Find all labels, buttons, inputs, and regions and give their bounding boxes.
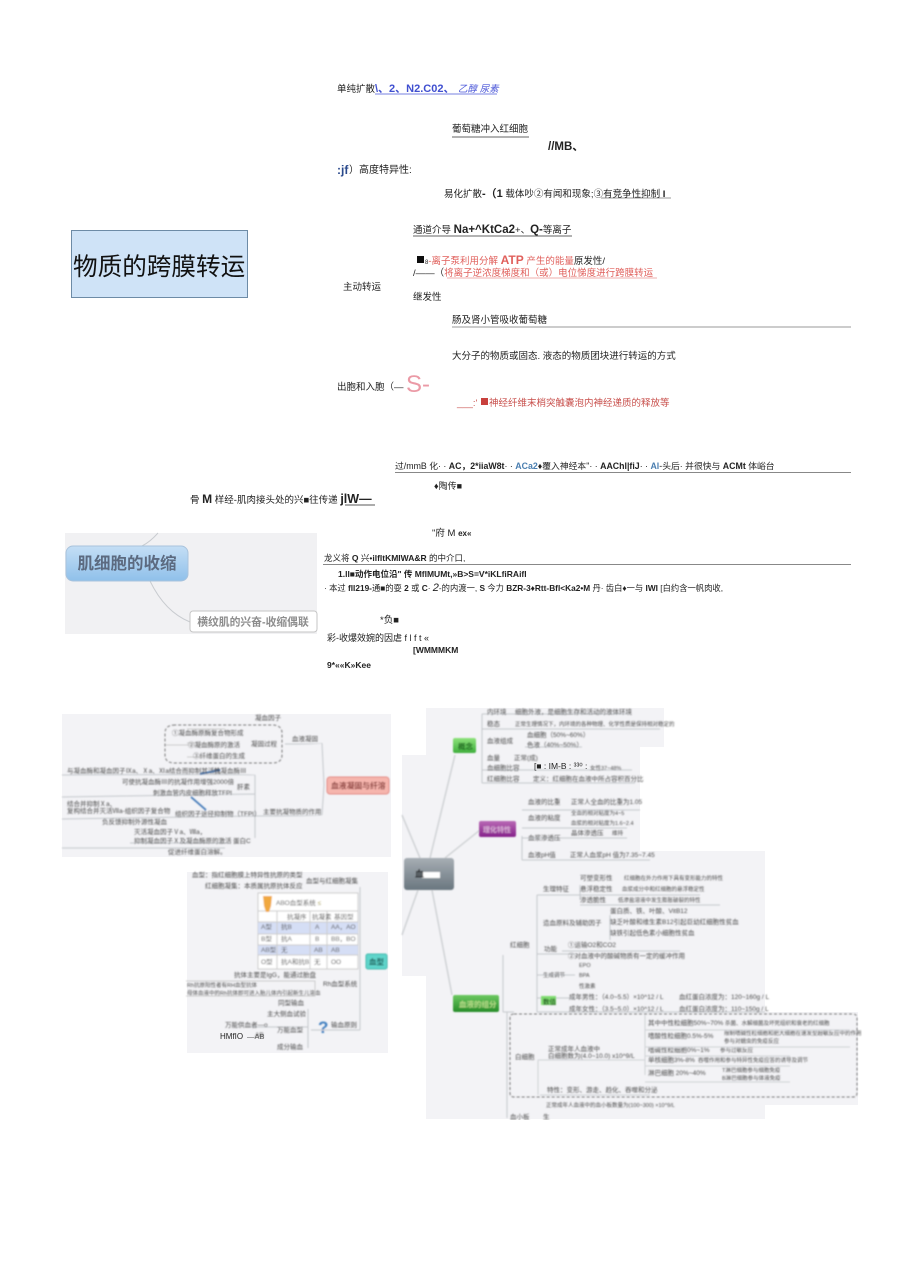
panel: blood overview mind map: 正常(成) — [514, 753, 538, 762]
node: blood components — [453, 995, 499, 1012]
icon: question mark: ? — [318, 1018, 328, 1037]
ABO blood group table: O型 — [261, 957, 273, 966]
panel: blood coagulation and fibrinolysis mind map: 促进纤维蛋白溶解。 — [168, 847, 226, 856]
node: excitation-contraction coupling: 横纹肌的兴奋-收缩偶联 — [197, 614, 309, 628]
ABO blood group table: B — [315, 936, 319, 943]
node: concept: 概念 — [458, 741, 473, 751]
panel: blood types mind map: 输血原则 — [331, 1020, 357, 1029]
panel: blood overview mind map: 淋巴细胞 20%~40% — [648, 1068, 706, 1077]
panel: blood coagulation and fibrinolysis mind map: ③纤维蛋白的生成 — [193, 751, 246, 760]
panel: blood coagulation and fibrinolysis mind map: 凝固过程 — [251, 739, 278, 748]
panel: blood overview mind map: 红细胞在外力作用下具有变形能力的特性 — [624, 874, 724, 882]
ABO blood group table: A — [315, 924, 320, 931]
ABO blood group table: ABO血型系统 ≤ — [276, 898, 322, 907]
ABO blood group table: 无 — [281, 946, 288, 954]
fragment label: [WMMMKM — [413, 645, 458, 655]
panel: blood coagulation and fibrinolysis mind map: 主要抗凝物质的作用 — [263, 807, 322, 816]
panel: blood overview mind map: 白细胞 — [515, 1052, 535, 1061]
panel: blood types mind map: AB — [255, 1032, 264, 1039]
panel: blood coagulation and fibrinolysis mind map: 负反馈抑制外源性凝血 — [102, 817, 168, 826]
ABO blood group table: 无 — [314, 958, 321, 966]
panel: blood types mind map: 血型与红细胞凝集 — [306, 876, 358, 885]
panel: blood overview mind map: 成年女性：（3.5~5.0）×10^12 / L — [569, 1004, 664, 1013]
node: coagulation and fibrinolysis — [327, 777, 389, 794]
exocytosis label: 出胞和入胞（— — [337, 381, 404, 393]
panel: muscle cell contraction mind map — [65, 533, 317, 634]
active transport label: 主动转运 — [343, 281, 382, 293]
panel: blood overview mind map: 血红蛋白浓度为：110~150g / L — [679, 1004, 769, 1013]
panel: blood overview mind map: 限制嗜碱性粒细胞和肥大细胞在速发型超敏反应中的作用 — [724, 1029, 862, 1037]
panel: blood overview mind map — [402, 707, 862, 1121]
panel: blood overview mind map: T淋巴细胞参与细胞免疫 — [722, 1066, 781, 1074]
macromolecule definition: 大分子的物质或固态. 液态的物质团块进行转运的方式 — [452, 350, 676, 362]
panel: blood overview mind map: 生成调节 — [543, 971, 566, 979]
panel: blood overview mind map: 参与对蠕虫的免疫反应 — [724, 1037, 780, 1045]
panel: blood overview mind map: EPO — [579, 963, 591, 969]
title box: 物质的跨膜转运 — [72, 230, 248, 298]
panel: blood types mind map: Rh血型系统 — [323, 979, 358, 988]
label M ex: "府 M ex« — [432, 527, 472, 539]
label: HMfIO: HMfIO — [220, 1032, 243, 1041]
node: physicochemical properties: 理化特性 — [483, 825, 511, 834]
panel: blood types mind map: 母体血液中的Rh抗体即可进入胎儿体内引起新生儿溶血 — [187, 989, 321, 997]
panel: blood types mind map: 万能血型 — [277, 1025, 304, 1034]
panel: blood coagulation and fibrinolysis mind map: 复构结合并灭活Ⅶa-组织因子复合物 — [67, 806, 171, 815]
panel: blood overview mind map: 正常成年人血液中 — [548, 1044, 600, 1053]
panel: blood overview mind map: BPA — [579, 973, 590, 979]
panel: blood overview mind map: 正常生理情况下，内环境的各种物理、化学性质是保持相对稳定的 — [515, 720, 675, 728]
panel: blood overview mind map: 稳态 — [487, 719, 500, 728]
connector lines — [62, 743, 324, 848]
panel: blood overview mind map: 成年男性：（4.0~5.5）×10^12 / L — [569, 992, 664, 1001]
panel: blood types mind map: 血型：指红细胞膜上特异性抗原的类型 — [192, 870, 303, 879]
panel: blood overview mind map: 血红蛋白浓度为：120~160g / L — [679, 992, 770, 1001]
node: blood (center) — [404, 858, 454, 890]
panel: blood coagulation and fibrinolysis mind map: 组织因子途径抑制物（TFPI） — [175, 809, 261, 818]
node: physicochemical properties — [479, 821, 516, 837]
panel: blood overview mind map: 维持 — [612, 829, 624, 837]
secondary active label: 继发性 — [413, 291, 442, 303]
panel: blood overview mind map: 正常成年人血液中的血小板数量为(100~300) ×10^9/L — [546, 1101, 675, 1109]
panel: blood overview mind map: 红细胞 — [510, 940, 530, 949]
panel: blood overview mind map: 女性37~48% — [590, 764, 621, 772]
panel: blood overview mind map: 定义：红细胞在血液中所占容积百分比 — [533, 774, 644, 783]
panel: blood overview mind map: 其中中性粒细胞50%~70% — [648, 1018, 724, 1027]
panel: blood coagulation and fibrinolysis mind map: 肝素 — [237, 782, 250, 791]
panel: blood coagulation and fibrinolysis mind map: 灭活凝血因子Ⅴa、Ⅷa， — [134, 827, 206, 836]
panel: blood overview mind map: B淋巴细胞参与体液免疫 — [722, 1074, 781, 1082]
neurotransmitter release: 神经纤维末梢突触囊泡内神经递质的释放等 — [489, 397, 670, 409]
panel: blood overview mind map: 渗透脆性 — [580, 895, 606, 904]
simple diffusion line: 单纯扩散 — [337, 83, 376, 95]
panel: blood coagulation and fibrinolysis mind map: 抑制凝血因子Ⅹ及凝血酶原的激活 — [134, 836, 232, 845]
panel: blood types mind map: 抗体主要是IgG，能通过胎盘 — [234, 970, 316, 979]
node: muscle cell contraction: 肌细胞的收缩 — [78, 553, 176, 573]
ABO blood group table: 抗凝素 — [312, 912, 332, 921]
definition line: 龙义将 Q 兴•ilfltKMIWA&R 的中介口, — [324, 553, 465, 563]
ABO blood group table: AB — [314, 947, 323, 954]
panel: blood overview mind map: 血浆的相对粘度为1.6~2.4 — [571, 819, 634, 827]
panel: blood overview mind map: 血液组成 — [487, 736, 514, 745]
simple diffusion line: \、2、N2.C02、 — [375, 83, 454, 95]
node: concept — [453, 738, 476, 753]
panel: blood overview mind map: 色液（40%~50%） — [527, 740, 583, 749]
panel: blood overview mind map: 白细胞数为(4.0~10.0) x10^9/L — [548, 1051, 635, 1060]
panel: blood overview mind map: 全血的相对粘度为4~5 — [571, 809, 624, 817]
panel: blood overview mind map: 特性：变形、游走、趋化、吞噬和分泌 — [547, 1085, 658, 1094]
panel: blood coagulation and fibrinolysis mind map: ②凝血酶原的激活 — [188, 740, 240, 749]
panel: blood overview mind map: 嗜碱性粒细胞0%~1% — [648, 1045, 710, 1054]
panel: blood overview mind map: 可塑变形性 — [580, 873, 613, 882]
panel: blood overview mind map: 血小板 — [510, 1112, 530, 1121]
panel: blood overview mind map: 低渗盐溶液中发生膨胀破裂的特性 — [618, 896, 701, 904]
simple diffusion line: 乙醇 尿素 — [458, 83, 500, 95]
connector lines — [402, 755, 480, 995]
panel: blood overview mind map: 生 — [543, 1112, 550, 1121]
panel: blood types mind map: 万能供血者—o — [225, 1020, 268, 1029]
neurotransmitter release: ___:' — [456, 398, 477, 409]
ABO blood group table: A型 — [261, 922, 272, 931]
panel: blood types mind map: Rh抗原阳性者有RH血型抗体 — [187, 981, 257, 989]
ABO blood group table: AB型 — [261, 945, 277, 954]
panel: blood overview mind map: 正常人全血的比重为1.05 — [571, 797, 643, 806]
panel: blood overview mind map: 蛋白质、铁、叶酸、VitB12 — [610, 906, 688, 915]
panel: blood types mind map: 同型输血 — [278, 998, 304, 1007]
panel: blood types mind map: 红细胞凝集：本质属抗原抗体反应 — [205, 881, 303, 890]
panel: blood overview mind map: 晶体渗透压 — [571, 828, 604, 837]
simple diffusion line — [337, 83, 500, 95]
node: blood (center): 血 — [415, 868, 424, 879]
label: dash AB: —AB — [247, 1032, 265, 1041]
panel: blood overview mind map: 血量 — [487, 753, 500, 762]
panel: blood overview mind map: 内环境 — [487, 707, 507, 716]
panel: blood overview mind map: ②对血液中的酸碱物质有一定的缓冲作用 — [568, 951, 685, 960]
panel: blood coagulation and fibrinolysis mind map: 刺激血管内皮细胞释放TFPI — [153, 788, 232, 797]
ABO blood group table: 抗A和抗B — [281, 957, 309, 966]
panel: blood overview mind map: 血细胞（50%~60%） — [527, 730, 589, 739]
panel: blood overview mind map: ①运输O2和CO2 — [568, 940, 616, 949]
ABO blood group table: AB — [331, 947, 340, 954]
ABO blood group table: BB，BO — [331, 936, 356, 943]
map background — [402, 708, 858, 1119]
ABO blood group table: 抗凝序 — [287, 912, 307, 921]
node: blood components: 血液的组分 — [459, 999, 497, 1009]
facilitated diffusion: 易化扩散-（1 载体吵②有闻和现象;③有竞争性抑制 I — [444, 187, 665, 200]
panel: blood overview mind map: 血液pH值 — [528, 850, 556, 859]
reverse gradient note: /——（将离子逆浓度梯度和（或）电位悌度进行跨膜转运 — [413, 267, 654, 279]
primary active transport: 8-离子泵利用分解 ATP 产生的能量原发性/ — [425, 253, 605, 267]
high specificity: :jf — [337, 163, 349, 177]
overlay fragment text: [■ : IM-B : ³³⁰ : — [534, 761, 587, 771]
node: blood type — [366, 954, 387, 969]
panel: blood overview mind map: 血浆渗透压 — [528, 833, 561, 842]
exocytosis label: S- — [406, 371, 430, 398]
panel: blood coagulation and fibrinolysis mind map: 血液凝固 — [292, 734, 318, 743]
panel: blood overview mind map: 缺铁引起低色素小细胞性贫血 — [610, 928, 695, 937]
fragment label: 9*««K»Kee — [327, 660, 371, 670]
contraction factors: 彩-收爆效婉的因虐 f l f t « — [327, 632, 429, 643]
panel: blood coagulation and fibrinolysis mind map: 凝血因子 — [255, 713, 282, 722]
exocytosis label — [337, 371, 430, 398]
panel: blood overview mind map: 红细胞比容 — [487, 774, 520, 783]
panel: blood overview mind map: 单核细胞3%-8% — [648, 1055, 695, 1064]
panel: blood overview mind map: 性激素 — [579, 982, 596, 990]
panel: blood overview mind map: 嗜酸性粒细胞0.5%-5% — [648, 1031, 714, 1040]
connector lines — [250, 887, 360, 1048]
panel: blood coagulation and fibrinolysis mind map: 抗凝血酶Ⅲ — [214, 766, 246, 775]
node: coagulation and fibrinolysis: 血液凝固与纤溶 — [331, 780, 386, 790]
high specificity — [337, 163, 412, 177]
panel: blood types mind map: 成分输血 — [277, 1042, 304, 1051]
calcium line: · 本过 fll219-通■的耍 2 或 C· 2-的内渡一, S 今力 BZR-3♦Rtt-Bfl<Ka2•M 丹· 齿白♦一与 IWI [白约含一帆肉收, — [324, 582, 723, 594]
panel: blood overview mind map: 参与过敏反应 — [720, 1046, 754, 1054]
panel: blood coagulation and fibrinolysis mind map: 结合并抑制Ⅹa、 — [67, 799, 116, 808]
panel: blood coagulation and fibrinolysis mind map: 可使抗凝血酶Ⅲ的抗凝作用增强2000倍 — [122, 777, 234, 786]
node: blood type: 血型 — [369, 956, 384, 966]
connector lines — [142, 533, 190, 622]
conduction label: ♦陶传■ — [434, 480, 462, 491]
panel: blood overview mind map: 功能 — [544, 944, 558, 953]
panel: blood overview mind map: 杀菌、水解细菌及坏死组织和衰老的红细胞 — [725, 1019, 830, 1027]
arrows — [191, 770, 220, 810]
panel: blood overview mind map: 数值 — [543, 997, 556, 1006]
panel: blood overview mind map: 血液的粘度 — [528, 813, 561, 822]
ABO blood group table: 基因型 — [334, 912, 354, 921]
panel: blood overview mind map: 悬浮稳定性 — [580, 884, 613, 893]
channel mediated: 通道介导 Na+^KtCa2+、Q-等离子 — [413, 224, 572, 236]
ABO blood group table — [258, 893, 358, 969]
title box: 物质的跨膜转运: 物质的跨膜转运 — [73, 253, 245, 281]
glucose into red cells: 葡萄糖冲入红细胞 — [452, 123, 529, 135]
ACh sequence: 过/mmB 化· · AC，2*iiaW8t· · ACa2♦覆入神经本"· · AAChl|fiJ· · Al-头后· 并很快与 ACMt 体峪台 — [395, 460, 775, 471]
panel: blood overview mind map: 血浆成分中和红细胞的悬浮稳定性 — [622, 885, 705, 893]
panel: blood overview mind map: 生理特征 — [543, 884, 570, 893]
panel: blood coagulation and fibrinolysis mind map: 蛋白C — [233, 836, 251, 845]
text block: membrane transport notes — [190, 83, 851, 670]
panel: blood coagulation and fibrinolysis mind map: ①凝血酶原酶复合物形成 — [172, 728, 244, 737]
panel: blood overview mind map: 血细胞比容 — [487, 763, 520, 772]
ABO blood group table: B型 — [261, 934, 272, 943]
action potential line: 1.ll■动作电位沿" 传 MflMUMt,»B>S=V*iKLfiRAifl — [338, 569, 527, 579]
panel: blood overview mind map: 造血原料及辅助因子 — [543, 918, 602, 927]
MB label: //MB、 — [548, 141, 584, 153]
panel: blood coagulation and fibrinolysis mind map — [62, 713, 391, 857]
ABO blood group table: 抗B — [281, 922, 292, 931]
panel: blood overview mind map: 正常人血浆pH 值为7.35~7.45 — [570, 850, 655, 859]
high specificity: ）高度特异性: — [349, 163, 412, 176]
node: excitation-contraction coupling — [190, 611, 317, 632]
panel: blood types mind map: 主大侧血试验 — [267, 1009, 306, 1018]
icon: bulb — [263, 896, 272, 912]
neuromuscular junction heading: 骨 M 样经-肌肉接头处的兴■往传递 jlW— — [190, 492, 372, 506]
ABO blood group table: AA，AO — [331, 924, 356, 931]
intestinal glucose: 肠及肾小管吸收葡萄糖 — [452, 314, 548, 326]
white mask over map bottom — [402, 1120, 872, 1132]
panel: blood coagulation and fibrinolysis mind map: 与凝血酶和凝血因子Ⅸa、Ⅹa、Ⅺa结合而抑制其活性 — [67, 766, 221, 775]
ABO blood group table: 抗A — [281, 934, 292, 943]
node: muscle cell contraction — [66, 546, 188, 581]
panel: blood overview mind map: 细胞外液，是细胞生存和活动的液体环境 — [515, 707, 632, 716]
panel: blood overview mind map: 吞噬作用和参与特异性免疫应答的诱导及调节 — [698, 1056, 809, 1064]
panel: blood overview mind map: 缺乏叶酸和维生素B12引起巨幼红细胞性贫血 — [610, 917, 739, 926]
panel: blood types mind map — [186, 870, 388, 1053]
load label: *负■ — [380, 614, 399, 626]
ABO blood group table: OO — [331, 959, 341, 966]
panel: blood overview mind map: 血液的比重 — [528, 797, 561, 806]
